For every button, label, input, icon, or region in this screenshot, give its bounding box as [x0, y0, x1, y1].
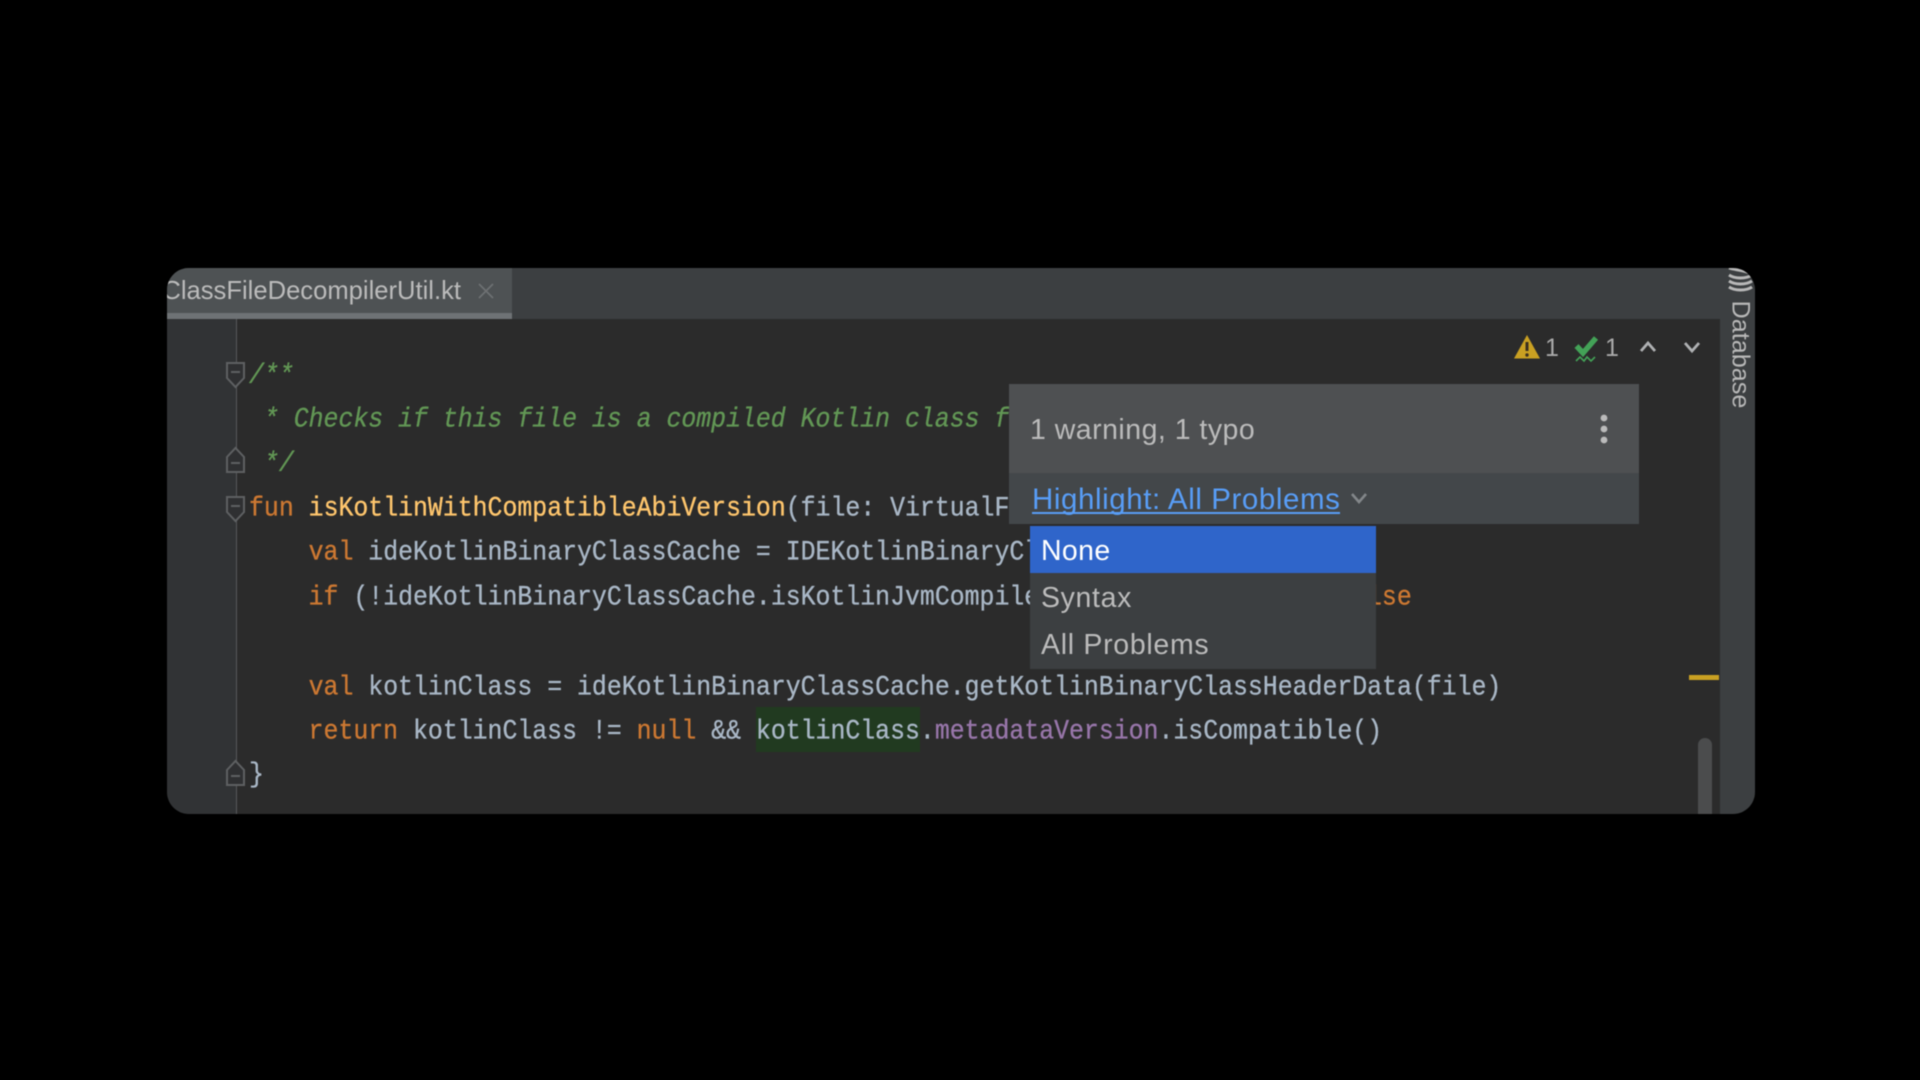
- code line 10: }: [249, 760, 264, 791]
- tab bar: [167, 268, 1720, 319]
- icon: previous problem: [1640, 340, 1656, 352]
- typo count: 1: [1605, 334, 1619, 362]
- option: All Problems: All Problems: [1041, 629, 1209, 661]
- sidebar label: Database: Database: [1726, 300, 1754, 408]
- option label None: None: [1041, 535, 1111, 567]
- scrollbar thumb: [1698, 738, 1712, 828]
- option: Syntax: Syntax: [1041, 582, 1132, 614]
- fold markers: [226, 362, 246, 786]
- popup: problems summary: [1009, 384, 1639, 524]
- error stripe marker: [1689, 675, 1719, 680]
- popup heading: 1 warning, 1 typo: [1030, 414, 1255, 446]
- code line 9: return kotlinClass != null && kotlinClass.metadataVersion.isCompatible(): [309, 716, 1382, 747]
- fold line: [236, 319, 237, 814]
- code: doc comment and function: [248, 361, 1501, 791]
- link underline: [1032, 512, 1340, 514]
- code line 3: */: [264, 449, 294, 480]
- usage highlight: [756, 707, 920, 752]
- sidebar strip: [1720, 268, 1755, 814]
- icon: tab close: [478, 284, 494, 298]
- popup footer: [1009, 473, 1639, 524]
- code line 1: /**: [249, 361, 294, 392]
- highlight link: Highlight: All Problems: [1032, 483, 1340, 516]
- icon: next problem: [1684, 342, 1700, 354]
- active file tab: [167, 268, 512, 319]
- icon: database: [1728, 267, 1754, 292]
- panel: editor window: [167, 268, 1755, 814]
- gutter: [167, 319, 236, 814]
- code line 8: val kotlinClass = ideKotlinBinaryClassCache.getKotlinBinaryClassHeaderData(file): [309, 672, 1501, 703]
- inspection widget: [1514, 334, 1700, 362]
- dropdown menu: [1030, 526, 1376, 669]
- active tab underline: [167, 313, 512, 319]
- warning count: 1: [1545, 334, 1559, 362]
- icon: more menu: [1600, 414, 1608, 444]
- icon: warning: [1514, 334, 1540, 360]
- option: None (selected): [1030, 526, 1376, 573]
- icon: typo check: [1574, 336, 1598, 362]
- icon: dropdown chevron: [1351, 493, 1367, 504]
- tab file name: ClassFileDecompilerUtil.kt: [167, 277, 461, 305]
